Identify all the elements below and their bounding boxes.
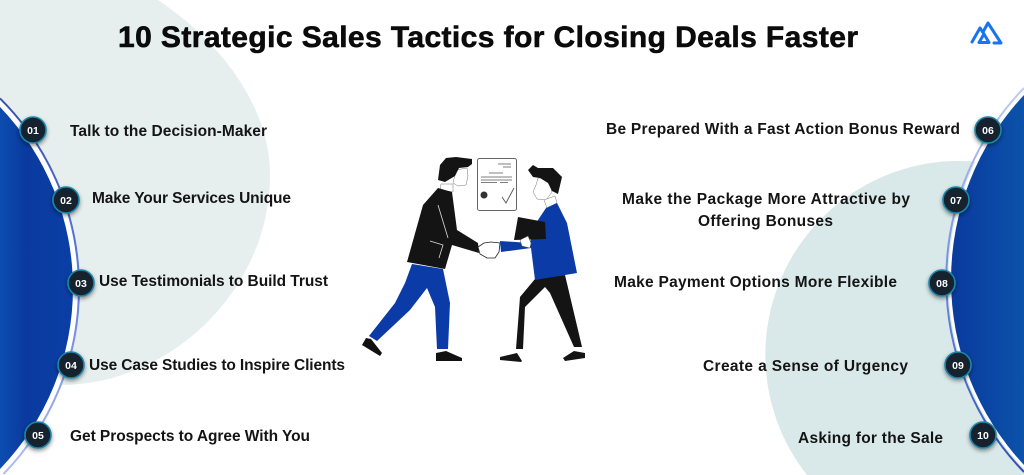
- step 07: Offering Bonuses: [698, 213, 833, 230]
- panel: right blue arc with list items: [606, 88, 1024, 472]
- step 07: 07: [950, 195, 962, 207]
- shoes: [500, 351, 585, 362]
- step 03: [68, 270, 328, 296]
- step 01: [20, 117, 267, 143]
- trousers: [516, 275, 582, 349]
- illustration: handshake with contract: [362, 157, 585, 362]
- jacket: [407, 188, 479, 269]
- step 03: 03: [75, 278, 87, 290]
- step 04: 04: [65, 360, 77, 372]
- icon: contract document: [478, 158, 516, 210]
- step 02: Make Your Services Unique: [92, 190, 291, 207]
- step 01: 01: [27, 125, 39, 137]
- contract lines: [481, 164, 512, 182]
- jacket: [500, 203, 577, 280]
- step 08: [614, 270, 955, 296]
- step 01: Talk to the Decision-Maker: [70, 123, 267, 140]
- step 09: [703, 352, 971, 378]
- step 02: 02: [60, 195, 72, 207]
- panel: left blue arc with list items: [0, 98, 345, 475]
- pale circle: right: [765, 161, 1024, 475]
- icon: handshake: [478, 242, 500, 258]
- seal: [480, 192, 488, 198]
- collar: [440, 184, 453, 192]
- figure: left businessman: [362, 157, 479, 361]
- face: [453, 168, 468, 186]
- step 02: [53, 187, 291, 213]
- step 10: [798, 422, 996, 448]
- step 07: Make the Package More Attractive by: [622, 191, 910, 208]
- step 06: 06: [982, 125, 994, 137]
- step 04: Use Case Studies to Inspire Clients: [89, 357, 345, 374]
- step 05: 05: [32, 430, 44, 442]
- left white band: [0, 100, 78, 475]
- jacket details: [430, 205, 448, 258]
- pale blob: top left: [0, 0, 270, 385]
- step 09: 09: [952, 360, 964, 372]
- step 06: Be Prepared With a Fast Action Bonus Reward: [606, 121, 960, 138]
- step 05: [25, 422, 310, 448]
- left thin arc line: [0, 98, 79, 474]
- hand on tablet: [520, 236, 531, 248]
- left blue semicircle: [0, 107, 73, 469]
- tablet: [514, 217, 546, 240]
- figure: right businessman: [500, 165, 585, 362]
- title: 10 Strategic Sales Tactics for Closing Deals Faster: [118, 21, 858, 54]
- hair: [438, 157, 472, 182]
- shoes: [362, 338, 462, 361]
- step 08: 08: [936, 278, 948, 290]
- step 08: Make Payment Options More Flexible: [614, 274, 897, 291]
- collar: [544, 196, 557, 208]
- icon: logo: [972, 23, 1001, 43]
- step 07: [622, 187, 969, 230]
- hair: [528, 165, 562, 194]
- face: [533, 178, 552, 200]
- step 10: 10: [977, 430, 989, 442]
- step 03: Use Testimonials to Build Trust: [99, 273, 328, 290]
- right blue semicircle: [951, 95, 1024, 465]
- right thin arc line: [946, 88, 1024, 472]
- right white band: [948, 91, 1024, 469]
- step 04: [58, 352, 345, 378]
- step 06: [606, 117, 1001, 143]
- trousers: [369, 264, 450, 349]
- step 09: Create a Sense of Urgency: [703, 358, 908, 375]
- check mark: [502, 188, 514, 203]
- step 10: Asking for the Sale: [798, 430, 943, 447]
- step 05: Get Prospects to Agree With You: [70, 428, 310, 445]
